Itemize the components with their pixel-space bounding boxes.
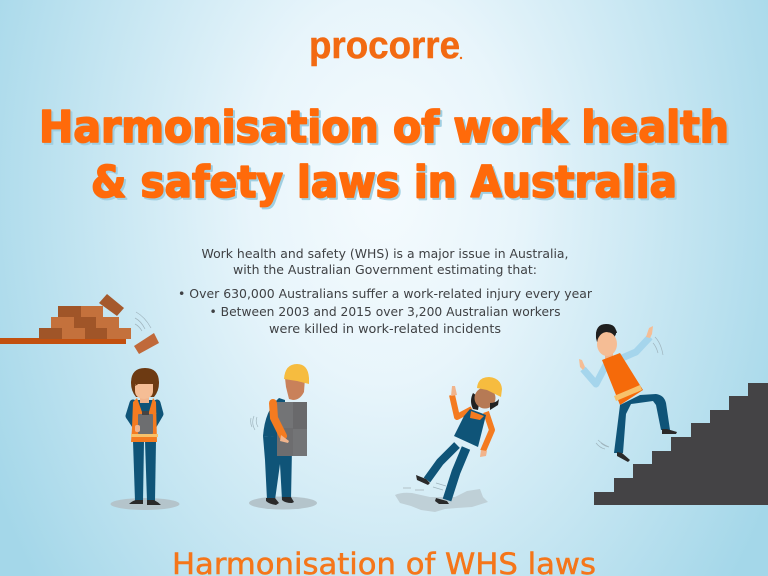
illustration: man falling down stairs <box>579 324 677 462</box>
intro text: • Over 630,000 Australians suffer a work-related injury every year <box>178 286 593 301</box>
intro text: with the Australian Government estimating that: <box>233 262 537 277</box>
logo: procorre: procorre <box>309 25 460 67</box>
title: & safety laws in Australia <box>93 159 679 210</box>
title <box>39 102 731 210</box>
title: & safety laws in Australia <box>91 157 677 208</box>
intro text <box>178 246 593 336</box>
illustration: worker slipping on a spill <box>395 377 502 512</box>
illustration: brick pile on scaffold <box>0 294 159 354</box>
title: Harmonisation of work health <box>41 104 731 155</box>
intro text: Work health and safety (WHS) is a major issue in Australia, <box>202 246 568 261</box>
illustration: staircase <box>594 383 768 505</box>
intro text: • Between 2003 and 2015 over 3,200 Australian workers <box>210 304 560 319</box>
illustration: woman with clipboard <box>110 368 180 510</box>
intro text: were killed in work-related incidents <box>269 321 501 336</box>
illustration: man carrying heavy blocks <box>249 364 317 510</box>
title: Harmonisation of work health <box>39 102 729 153</box>
